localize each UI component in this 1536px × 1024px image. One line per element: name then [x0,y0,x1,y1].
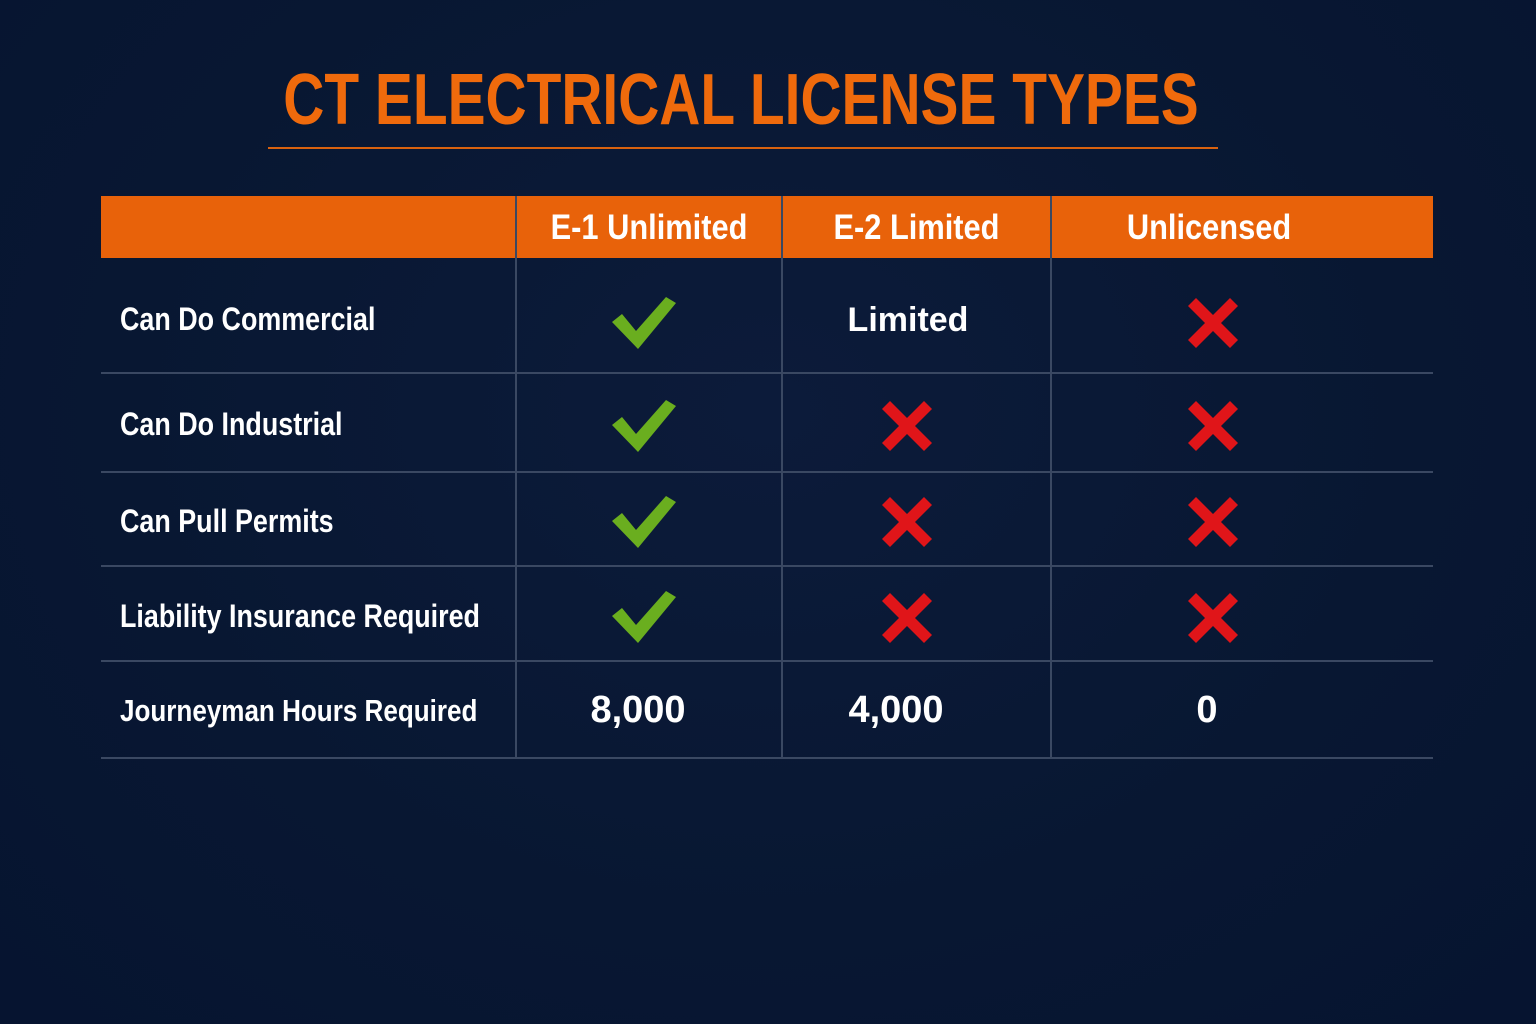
title: CT ELECTRICAL LICENSE TYPES [283,60,1199,140]
header: E-1 Unlimited: E-1 Unlimited [551,208,747,247]
table [101,196,1433,759]
text: Liability Insurance Required [120,598,480,634]
text: Can Do Industrial [120,406,343,442]
text: Can Pull Permits [120,503,334,539]
value: Limited: Limited [848,301,968,339]
header: E-2 Limited: E-2 Limited [833,208,999,247]
text: Journeyman Hours Required [120,693,477,728]
header row [101,196,1433,258]
value: 4,000: 4,000 [848,689,944,731]
row labels: Can Do Commercial [120,301,375,337]
value: 0: 0 [1196,689,1218,731]
header: Unlicensed: Unlicensed [1127,208,1291,247]
value: 8,000: 8,000 [590,689,686,731]
